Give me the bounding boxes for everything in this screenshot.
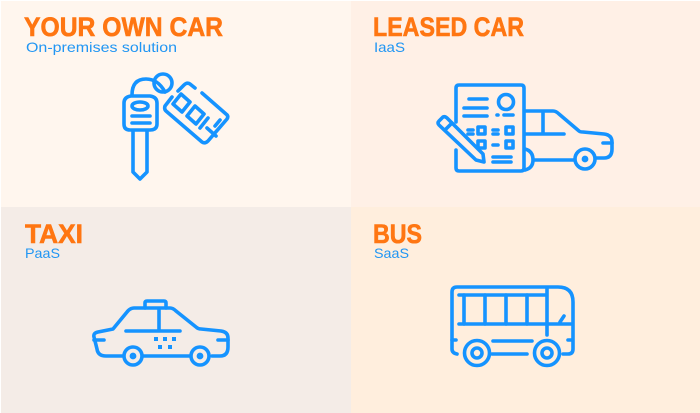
subheading: SaaS: SaaS <box>374 245 409 261</box>
panel: your own car <box>1 1 351 207</box>
panel: leased car <box>351 1 700 207</box>
heading: taxi: TAXI <box>25 219 83 249</box>
heading: bus: BUS <box>373 219 422 249</box>
icon: contract and car <box>438 85 612 171</box>
subheading: PaaS: PaaS <box>25 245 60 261</box>
heading: leased car: LEASED CAR <box>373 12 524 42</box>
icon: car key with fob <box>124 74 228 179</box>
panel: taxi <box>1 207 351 413</box>
subheading: IaaS: IaaS <box>374 39 405 55</box>
icon: bus <box>452 287 573 366</box>
icon: taxi car <box>94 301 228 365</box>
panel: bus <box>351 207 700 413</box>
heading: your own car: YOUR OWN CAR <box>24 12 223 42</box>
subheading: on-premises solution: On-premises solution <box>26 39 177 55</box>
